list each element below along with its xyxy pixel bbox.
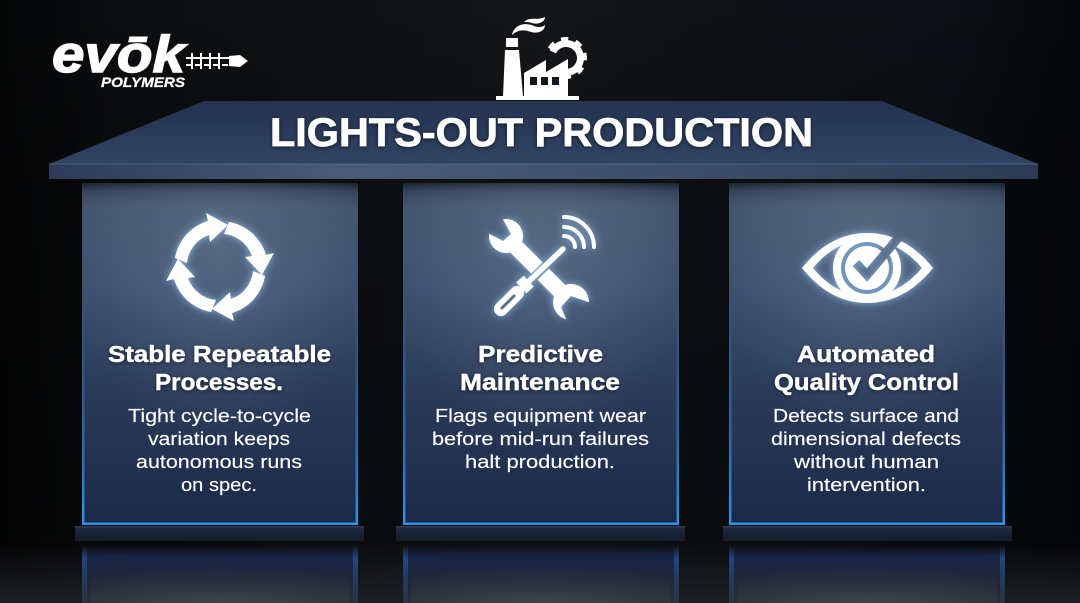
body text: without human	[793, 451, 939, 472]
title: LIGHTS-OUT PRODUCTION	[270, 111, 813, 155]
heading: Stable Repeatable	[108, 341, 331, 367]
body text: intervention.	[807, 474, 926, 495]
icon: factory with gear	[496, 17, 591, 100]
body text: on spec.	[181, 474, 257, 495]
body text: Flags equipment wear	[435, 405, 646, 426]
icon: extruder screw	[186, 53, 248, 69]
pillar base	[723, 526, 1012, 541]
heading	[108, 341, 331, 395]
logo: Evok Polymers: evōk	[52, 26, 188, 84]
heading: Automated	[797, 341, 935, 367]
heading: Processes.	[155, 369, 283, 395]
panel: automated quality control	[723, 183, 1012, 541]
panel: stable repeatable processes	[75, 183, 364, 541]
logo: Evok Polymers	[52, 26, 248, 90]
roof eave	[49, 164, 1038, 179]
pillar base	[75, 526, 364, 541]
body text: variation keeps	[148, 428, 290, 449]
body text: dimensional defects	[771, 428, 961, 449]
heading: Quality Control	[774, 369, 959, 395]
body text: Detects surface and	[773, 405, 959, 426]
pillar base	[396, 526, 685, 541]
body text: before mid-run failures	[432, 428, 649, 449]
icon: eye with check mark	[802, 233, 933, 303]
smoke	[512, 17, 545, 35]
panel: roof	[49, 101, 1038, 179]
body text	[771, 405, 961, 495]
heading	[460, 341, 620, 395]
heading	[774, 341, 959, 395]
icon: wrench, screwdriver and signal	[489, 217, 594, 320]
heading: Predictive	[478, 341, 603, 367]
body text	[128, 405, 311, 495]
body text: Tight cycle-to-cycle	[128, 405, 311, 426]
logo: Evok Polymers: POLYMERS	[101, 74, 186, 90]
panel: predictive maintenance	[396, 183, 685, 541]
floor reflections	[0, 541, 1080, 603]
body text	[432, 405, 649, 472]
heading: Maintenance	[460, 369, 620, 395]
body text: autonomous runs	[136, 451, 302, 472]
body text: halt production.	[465, 451, 615, 472]
icon: circular arrows	[166, 213, 274, 321]
